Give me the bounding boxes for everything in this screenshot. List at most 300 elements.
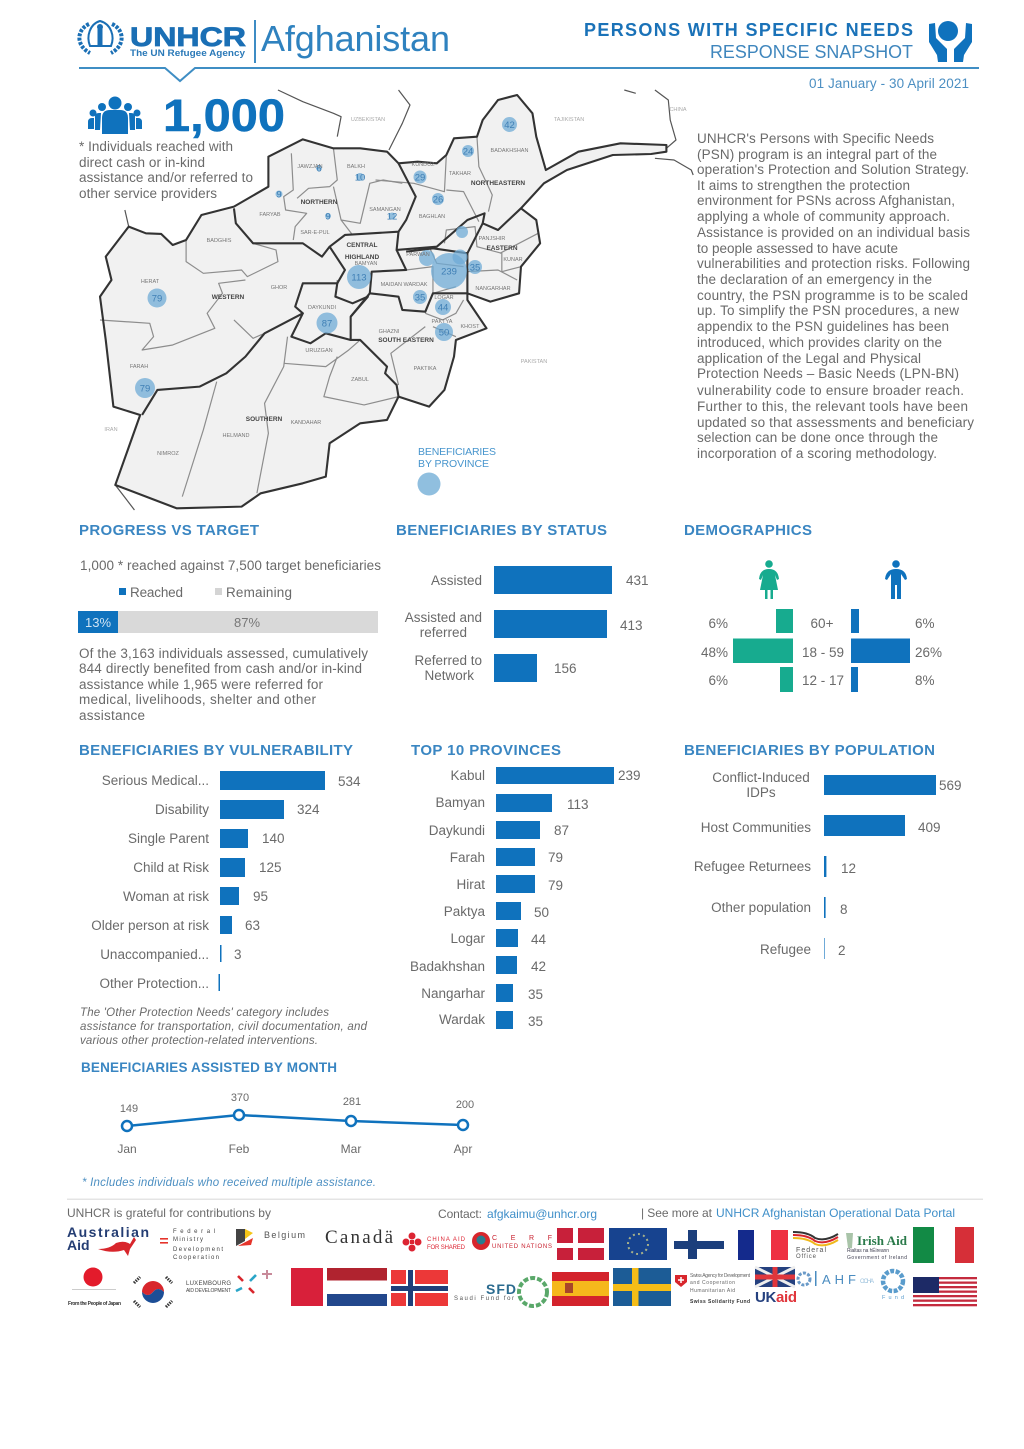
beneficiary bubbles: 24 (463, 146, 473, 158)
beneficiary bubbles: 42 (504, 120, 515, 131)
logo: China aid (402, 1232, 466, 1252)
age groups: 12 - 17 (802, 673, 844, 688)
logo: Japan (68, 1268, 121, 1307)
headline caption (79, 139, 253, 201)
beneficiary bubbles: 50 (439, 328, 449, 338)
logo: SFD (454, 1278, 547, 1306)
status labels: Assisted and (405, 610, 482, 625)
province labels: Kabul (450, 768, 485, 783)
intro paragraph: Protection Needs – Basic Needs (LPN-BN) (697, 366, 959, 381)
population labels: Other population (711, 900, 811, 915)
vulnerability values (234, 774, 361, 962)
logo: UN emblem (882, 1271, 904, 1301)
flag: USA (913, 1277, 977, 1306)
flag: France (738, 1230, 788, 1260)
country labels: TAJIKISTAN (554, 117, 584, 123)
report title: PERSONS WITH SPECIFIC NEEDS (584, 20, 913, 40)
female percentages: 6% (708, 673, 728, 688)
logo: Belgium: Belgium (264, 1230, 305, 1240)
province labels: Logar (450, 931, 486, 946)
month labels: Jan (117, 1142, 137, 1156)
progress description (79, 646, 368, 723)
country labels: CHINA (669, 107, 687, 113)
footer rule (67, 1198, 983, 1200)
province values: 87 (554, 823, 569, 838)
logo: Austria (160, 1229, 223, 1261)
month labels: Apr (454, 1142, 472, 1156)
vulnerability labels: Unaccompanied... (100, 947, 209, 962)
legend: Reached (130, 585, 183, 600)
status labels: referred (420, 625, 467, 640)
map legend (418, 446, 496, 496)
vulnerability labels: Disability (155, 802, 209, 817)
month values: 281 (343, 1096, 361, 1108)
logo: Luxembourg (186, 1270, 272, 1294)
province values: 239 (618, 768, 641, 783)
population values: 569 (939, 778, 962, 793)
logo: Australian Aid: Australian (67, 1224, 149, 1240)
month values: 370 (231, 1092, 249, 1104)
heading: TOP 10 PROVINCES (411, 742, 561, 759)
vulnerability labels: Older person at risk (91, 918, 209, 933)
intro paragraph (697, 131, 974, 461)
logo: Germany (793, 1232, 838, 1260)
province bars (496, 767, 614, 1029)
vulnerability values: 324 (297, 802, 320, 817)
logo: Switzerland: and Cooperation (690, 1280, 735, 1286)
total reached number: 1,000 (163, 90, 285, 141)
progress bar (78, 611, 378, 633)
province labels: Farah (450, 850, 485, 865)
intro paragraph: vulnerability code to ensure broader reach. (697, 383, 964, 398)
legend: Remaining (226, 585, 292, 600)
status bars (494, 566, 612, 682)
province labels: LOGAR (434, 295, 454, 301)
logo: Germany: Federal (796, 1247, 826, 1254)
beneficiary bubbles (135, 117, 517, 398)
intro paragraph: application of the Legal and Physical (697, 351, 921, 366)
logo: Canada: Canadä (325, 1227, 394, 1248)
beneficiary bubbles: 113 (351, 272, 367, 284)
province labels: Paktya (444, 904, 485, 919)
logo: Australian Aid (67, 1224, 149, 1256)
province labels: FARYAB (259, 212, 281, 218)
province values: 35 (528, 987, 543, 1002)
progress description: assistance (79, 708, 145, 723)
country labels (104, 107, 687, 433)
province labels: PANJSHIR (479, 236, 505, 242)
report subtitle: RESPONSE SNAPSHOT (710, 42, 913, 62)
province labels: BAGHLAN (419, 214, 445, 220)
region labels: SOUTHERN (246, 416, 283, 423)
line chart (122, 1110, 468, 1131)
legend heading: BENEFICIARIES (418, 446, 496, 458)
intro paragraph: appendix to the PSN guidelines has been (697, 319, 949, 334)
region labels: HIGHLAND (345, 254, 379, 261)
headline caption: other service providers (79, 186, 217, 201)
vulnerability values: 125 (259, 860, 282, 875)
icon: hands holding person (929, 21, 972, 62)
status values: 431 (626, 573, 649, 588)
logo wordmark: UNHCR (130, 22, 246, 52)
province labels: BADAKHSHAN (491, 148, 528, 154)
target sentence: 1,000 * reached against 7,500 target beneficiaries (80, 558, 381, 573)
icon: UNHCR logo emblem (79, 21, 122, 53)
heading: BENEFICIARIES BY POPULATION (684, 742, 935, 759)
intro paragraph: UNHCR's Persons with Specific Needs (697, 131, 934, 146)
status labels: Referred to (414, 653, 482, 668)
age groups: 18 - 59 (802, 645, 844, 660)
beneficiary bubbles: 35 (470, 262, 480, 274)
province labels: JAWZJAN (297, 164, 323, 170)
province labels: HELMAND (223, 433, 249, 439)
province labels: Badakhshan (410, 959, 485, 974)
vulnerability values: 63 (245, 918, 260, 933)
logo: Switzerland (675, 1273, 751, 1305)
logo tagline: The UN Refugee Agency (130, 48, 245, 58)
logo: Belgium (236, 1229, 305, 1246)
beneficiary bubbles: 35 (415, 292, 425, 304)
province labels: GHAZNI (379, 329, 400, 335)
logo: UK aid (755, 1267, 797, 1306)
status labels: Network (424, 668, 474, 683)
panel: beneficiaries by vulnerability (79, 742, 368, 1047)
country labels: IRAN (104, 427, 118, 433)
intro paragraph: It aims to strengthen the protection (697, 178, 910, 193)
vulnerability bars (218, 771, 325, 991)
beneficiary bubbles: 6 (316, 164, 322, 174)
intro paragraph: selection can be done once through the (697, 430, 938, 445)
population labels (694, 770, 811, 957)
progress bar: 13% (85, 615, 111, 630)
icon: man (885, 560, 907, 599)
flag: Finland (674, 1230, 724, 1259)
population values: 2 (838, 943, 846, 958)
panel: beneficiaries by status (396, 522, 649, 683)
female bars (733, 609, 793, 692)
flag: Spain (552, 1272, 609, 1306)
heading: DEMOGRAPHICS (684, 522, 812, 539)
flag: Norway (391, 1270, 448, 1306)
vulnerability values: 95 (253, 889, 268, 904)
province labels: SAMANGAN (369, 207, 401, 213)
progress description: Of the 3,163 individuals assessed, cumulatively (79, 646, 368, 661)
logo divider (254, 20, 256, 63)
vulnerability labels: Child at Risk (133, 860, 209, 875)
beneficiary bubbles: 12 (387, 212, 397, 222)
beneficiary bubbles: 79 (140, 384, 150, 394)
age groups (802, 616, 844, 688)
logo: AHF: AHF (822, 1272, 856, 1287)
vulnerability values: 534 (338, 774, 361, 789)
male bars (851, 609, 910, 692)
male percentages: 26% (915, 645, 942, 660)
country labels: PAKISTAN (521, 359, 547, 365)
logo: China aid: CHINA AID (427, 1237, 466, 1243)
month labels: Mar (341, 1142, 361, 1156)
intro paragraph: to people assessed to have acute (697, 241, 898, 256)
intro paragraph: vulnerabilities and protection risks. Following (697, 256, 970, 271)
male percentages: 6% (915, 616, 935, 631)
province labels: Wardak (439, 1012, 485, 1027)
province labels: PAKTYA (432, 319, 453, 325)
status labels: Assisted (431, 573, 482, 588)
population bars (824, 775, 936, 959)
vulnerability labels: Serious Medical... (102, 773, 209, 788)
heading: BENEFICIARIES ASSISTED BY MONTH (81, 1060, 337, 1075)
logo: CERF: UNITED NATIONS (492, 1244, 552, 1250)
status values: 413 (620, 618, 643, 633)
month values: 200 (456, 1099, 474, 1111)
province labels: FARAH (130, 364, 148, 370)
region labels: WESTERN (212, 294, 245, 301)
headline figure (79, 90, 285, 201)
province labels: ZABUL (351, 377, 369, 383)
data portal link: | See more at (641, 1206, 713, 1220)
headline caption: direct cash or in-kind (79, 155, 205, 170)
province labels: HERAT (141, 279, 160, 285)
beneficiary bubbles: 87 (322, 318, 332, 330)
status values (554, 573, 649, 676)
logo: Germany: Office (796, 1254, 817, 1260)
intro paragraph: country, the PSN programme is to be scaled (697, 288, 968, 303)
vulnerability labels (91, 773, 209, 991)
legend bubble (418, 472, 440, 496)
province labels: NIMROZ (157, 451, 179, 457)
icon: woman (759, 560, 779, 599)
flag: Monaco (291, 1268, 323, 1306)
female percentages: 6% (708, 616, 728, 631)
intro paragraph: updated so that assessments and beneficiary (697, 415, 974, 430)
province labels: PARWAN (406, 252, 430, 258)
vulnerability labels: Woman at risk (123, 889, 209, 904)
intro paragraph: up. To simplify the PSN procedures, a new (697, 303, 959, 318)
vulnerability values: 3 (234, 947, 242, 962)
province values: 113 (567, 797, 589, 812)
male percentages: 8% (915, 673, 935, 688)
header (79, 18, 979, 91)
province labels: Daykundi (429, 823, 485, 838)
flag: Republic of Korea (134, 1277, 172, 1307)
beneficiary bubbles: 44 (438, 302, 448, 314)
province labels: BALKH (347, 164, 365, 170)
region labels: SOUTH EASTERN (378, 337, 434, 344)
heading: BENEFICIARIES BY VULNERABILITY (79, 742, 353, 759)
logo: UK aid: UKaid (755, 1289, 797, 1306)
progress description: medical, livelihoods, shelter and other (79, 692, 316, 707)
province labels: GHOR (271, 285, 287, 291)
intro paragraph: applying a whole of community approach. (697, 209, 950, 224)
icon: group of people (88, 96, 142, 134)
header rule with notch (79, 68, 979, 81)
logo: AHF: OCHA (860, 1279, 874, 1285)
intro paragraph: the declaration of an emergency in the (697, 272, 932, 287)
beneficiary bubbles: 239 (441, 266, 457, 278)
population labels: IDPs (746, 785, 776, 800)
logo: CERF (472, 1232, 552, 1250)
logo: AHF (798, 1271, 874, 1287)
map of Afghanistan (100, 90, 693, 510)
intro paragraph: Further to this, the relevant tools have been (697, 399, 968, 414)
contact (438, 1207, 597, 1221)
logo: SFD: SFD (486, 1281, 516, 1297)
panel: demographics (684, 522, 942, 692)
progress description: assistance while 1,965 were referred for (79, 677, 324, 692)
logo: Switzerland: Humanitarian Aid (690, 1288, 735, 1294)
month labels: Feb (229, 1142, 250, 1156)
province labels: DAYKUNDI (308, 305, 336, 311)
status values: 156 (554, 661, 577, 676)
population labels: Refugee (760, 942, 811, 957)
logo: CERF: CERF (492, 1235, 552, 1242)
legend (119, 585, 292, 600)
vulnerability labels: Single Parent (128, 831, 209, 846)
heading: PROGRESS VS TARGET (79, 522, 259, 539)
province labels: NANGARHAR (475, 286, 511, 292)
logo: Irish Aid: Government of Ireland (847, 1255, 907, 1261)
beneficiary bubbles: 29 (415, 172, 425, 184)
logo: Japan: From the People of Japan (68, 1301, 121, 1307)
province labels: PAKTIKA (414, 366, 437, 372)
international borders (115, 90, 693, 510)
intro paragraph: environment for PSNs across Afghanistan, (697, 193, 955, 208)
panel: top 10 provinces (410, 742, 641, 1029)
logo: Luxembourg: LUXEMBOURG (186, 1281, 231, 1287)
logo: Austria: Cooperation (173, 1255, 219, 1261)
vulnerability note: various other protection-related interventions. (80, 1035, 318, 1047)
province labels (130, 148, 528, 457)
region labels: NORTHERN (301, 199, 338, 206)
logo: Australian Aid: Aid (67, 1237, 90, 1253)
logo: Austria: Federal (173, 1229, 215, 1235)
panel: beneficiaries assisted by month (81, 1060, 474, 1156)
population labels: Conflict-Induced (712, 770, 810, 785)
panel: beneficiaries by population (684, 742, 962, 959)
beneficiary bubbles: 9 (325, 212, 331, 222)
province values: 35 (528, 1014, 543, 1029)
province labels: BAMYAN (355, 261, 377, 267)
female percentages (701, 616, 728, 688)
intro paragraph: Assistance is provided on an individual basis (697, 225, 970, 240)
vulnerability values: 140 (262, 831, 285, 846)
province labels: SAR-E-PUL (300, 230, 330, 236)
flag: Netherlands (327, 1268, 387, 1306)
logo: China aid: FOR SHARED (427, 1245, 466, 1251)
logo: UN emblem: Fund (882, 1295, 904, 1301)
footnote: * Includes individuals who received multiple assistance. (82, 1177, 376, 1189)
flag: Italy (913, 1227, 974, 1263)
logo: Switzerland: Swiss Solidarity Fund (690, 1299, 750, 1305)
beneficiary bubbles: 26 (433, 194, 443, 206)
region labels: EASTERN (486, 245, 518, 252)
age groups: 60+ (811, 616, 834, 631)
province labels: BADGHIS (207, 238, 232, 244)
province values: 50 (534, 905, 549, 920)
province values (528, 768, 641, 1029)
progress bar: 87% (234, 615, 260, 630)
flag: Sweden (613, 1268, 671, 1306)
province labels: KANDAHAR (291, 420, 321, 426)
region boundaries (100, 95, 666, 508)
intro paragraph: incorporation of a scoring methodology. (697, 446, 937, 461)
vulnerability note: assistance for transportation, civil documentation, and (80, 1021, 368, 1033)
logo: Switzerland: Swiss Agency for Development (690, 1273, 751, 1279)
population values: 8 (840, 902, 848, 917)
month values (120, 1092, 474, 1115)
province labels: Bamyan (435, 795, 485, 810)
population values (838, 778, 962, 958)
province labels (410, 768, 486, 1027)
heading: BENEFICIARIES BY STATUS (396, 522, 607, 539)
beneficiary bubbles: 79 (152, 294, 162, 304)
vulnerability note (80, 1007, 368, 1047)
month values: 149 (120, 1103, 138, 1115)
logo: Irish Aid: Rialtas na hÉireann (847, 1247, 889, 1254)
province labels: Hirat (456, 877, 485, 892)
province values: 42 (531, 959, 546, 974)
province labels: KHOST (461, 324, 480, 330)
region labels (212, 180, 525, 423)
status labels (405, 573, 482, 683)
region labels: CENTRAL (346, 242, 378, 249)
beneficiary bubbles: 10 (355, 172, 365, 184)
female percentages: 48% (701, 645, 728, 660)
province labels: Nangarhar (421, 986, 485, 1001)
panel: progress vs target (78, 522, 381, 723)
intro paragraph: operation's Protection and Solution Strategy. (697, 162, 969, 177)
logo: Luxembourg: AID DEVELOPMENT (186, 1288, 231, 1294)
flag: European Union (609, 1228, 667, 1260)
headline caption: * Individuals reached with (79, 139, 233, 154)
data portal link: UNHCR Afghanistan Operational Data Portal (716, 1206, 955, 1220)
headline caption: assistance and/or referred to (79, 170, 253, 185)
province labels: TAKHAR (449, 171, 471, 177)
population labels: Refugee Returnees (694, 859, 811, 874)
province labels: KUNAR (503, 257, 523, 263)
country title: Afghanistan (261, 18, 450, 59)
province labels: URUZGAN (305, 348, 333, 354)
country labels: UZBEKISTAN (351, 117, 385, 123)
province values: 44 (531, 932, 547, 947)
donor logos (67, 1224, 977, 1307)
map shapes (100, 90, 693, 510)
province values: 79 (548, 850, 563, 865)
province labels: MAIDAN WARDAK (381, 282, 428, 288)
logo: SFD: Saudi Fund for (454, 1296, 514, 1302)
beneficiary bubbles: 9 (276, 190, 282, 200)
contributions note: UNHCR is grateful for contributions by (67, 1206, 271, 1220)
male percentages (915, 616, 942, 688)
intro paragraph: introduced, which provides clarity on the (697, 335, 942, 350)
legend subheading: BY PROVINCE (418, 458, 489, 470)
footer (67, 1198, 983, 1221)
month labels (117, 1142, 472, 1156)
progress description: 844 directly benefited from cash and/or in-kind (79, 661, 362, 676)
population values: 409 (918, 820, 941, 835)
province boundaries (100, 137, 538, 497)
logo: Irish Aid (846, 1233, 908, 1261)
country fill (100, 95, 666, 508)
vulnerability note: The 'Other Protection Needs' category includes (80, 1007, 329, 1019)
vulnerability labels: Other Protection... (99, 976, 209, 991)
logo: Austria: Ministry (173, 1237, 203, 1243)
population values: 12 (841, 861, 856, 876)
region labels: NORTHEASTERN (471, 180, 525, 187)
province labels: KUNDUZ (412, 162, 435, 168)
date range: 01 January - 30 April 2021 (809, 76, 969, 91)
contact: afgkaimu@unhcr.org (487, 1207, 597, 1221)
population labels: Host Communities (701, 820, 811, 835)
